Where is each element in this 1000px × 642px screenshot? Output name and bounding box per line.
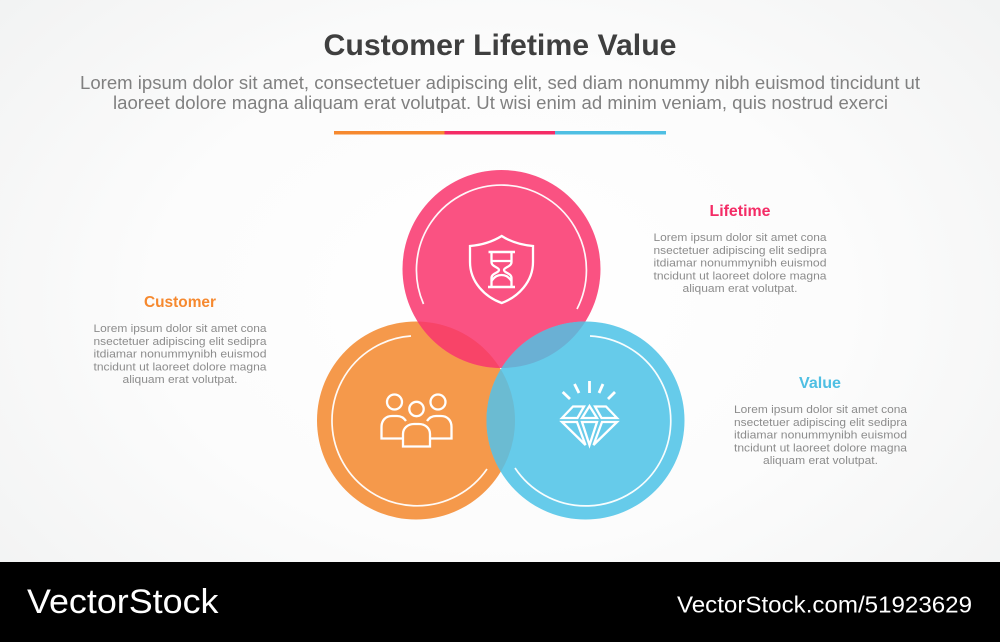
- circle: lifetime: [402, 170, 600, 368]
- text block: customer: tncidunt ut laoreet dolore magna: [94, 362, 267, 374]
- text block: customer: nsectetuer adipiscing elit sedipra: [94, 336, 267, 348]
- watermark url: VectorStock.com/51923629: [677, 592, 972, 618]
- text block: value: itdiamar nonummynibh euismod: [734, 430, 907, 442]
- overlap: customer and lifetime: [418, 322, 500, 368]
- text block: value: [734, 404, 908, 467]
- circle: value: [486, 322, 684, 520]
- overlap: customer and value: [486, 369, 515, 472]
- text block: value: nsectetuer adipiscing elit sedipra: [734, 417, 908, 429]
- tri-colour divider bar: [334, 131, 666, 134]
- panel: lifetime: [654, 203, 827, 295]
- inner ring: value: [515, 336, 671, 506]
- venn diagram: [317, 170, 684, 520]
- icon: sparkling diamond: [562, 381, 617, 445]
- text block: lifetime: itdiamar nonummynibh euismod: [654, 258, 826, 270]
- heading: lifetime: Lifetime: [710, 203, 771, 220]
- inner ring: lifetime: [416, 185, 586, 309]
- text block: lifetime: Lorem ipsum dolor sit amet cona: [654, 232, 827, 244]
- text block: lifetime: tncidunt ut laoreet dolore magna: [654, 270, 827, 282]
- icon: shield with hourglass: [470, 236, 533, 303]
- heading: customer: Customer: [144, 294, 216, 311]
- watermark footer bar: [0, 562, 1000, 642]
- text block: customer: Lorem ipsum dolor sit amet cona: [94, 323, 267, 335]
- watermark logo: VectorStock: [27, 583, 219, 621]
- inner ring: customer: [332, 336, 487, 506]
- circle: customer: [317, 322, 515, 520]
- subtitle text: Lorem ipsum dolor sit amet, consectetuer adipiscing elit, sed diam nonummy nibh euismod tincidunt ut: [80, 73, 920, 93]
- text block: value: tncidunt ut laoreet dolore magna: [734, 442, 908, 454]
- text block: value: Lorem ipsum dolor sit amet cona: [734, 404, 908, 416]
- subtitle text: laoreet dolore magna aliquam erat volutpat. Ut wisi enim ad minim veniam, quis nostrud exerci: [113, 93, 888, 113]
- text block: lifetime: [654, 232, 827, 295]
- heading: value: Value: [799, 375, 841, 392]
- text block: value: aliquam erat volutpat.: [763, 455, 878, 467]
- panel: value: [734, 375, 908, 467]
- text block: customer: itdiamar nonummynibh euismod: [94, 348, 266, 360]
- icon: three people: [382, 394, 452, 446]
- text block: lifetime: nsectetuer adipiscing elit sedipra: [654, 245, 827, 257]
- text block: lifetime: aliquam erat volutpat.: [682, 283, 798, 295]
- title: Customer Lifetime Value: [324, 29, 676, 62]
- text block: customer: aliquam erat volutpat.: [122, 374, 238, 386]
- subtitle text: [80, 73, 920, 113]
- text block: customer: [94, 323, 267, 386]
- overlap: lifetime and value: [502, 322, 586, 368]
- panel: customer: [94, 294, 267, 386]
